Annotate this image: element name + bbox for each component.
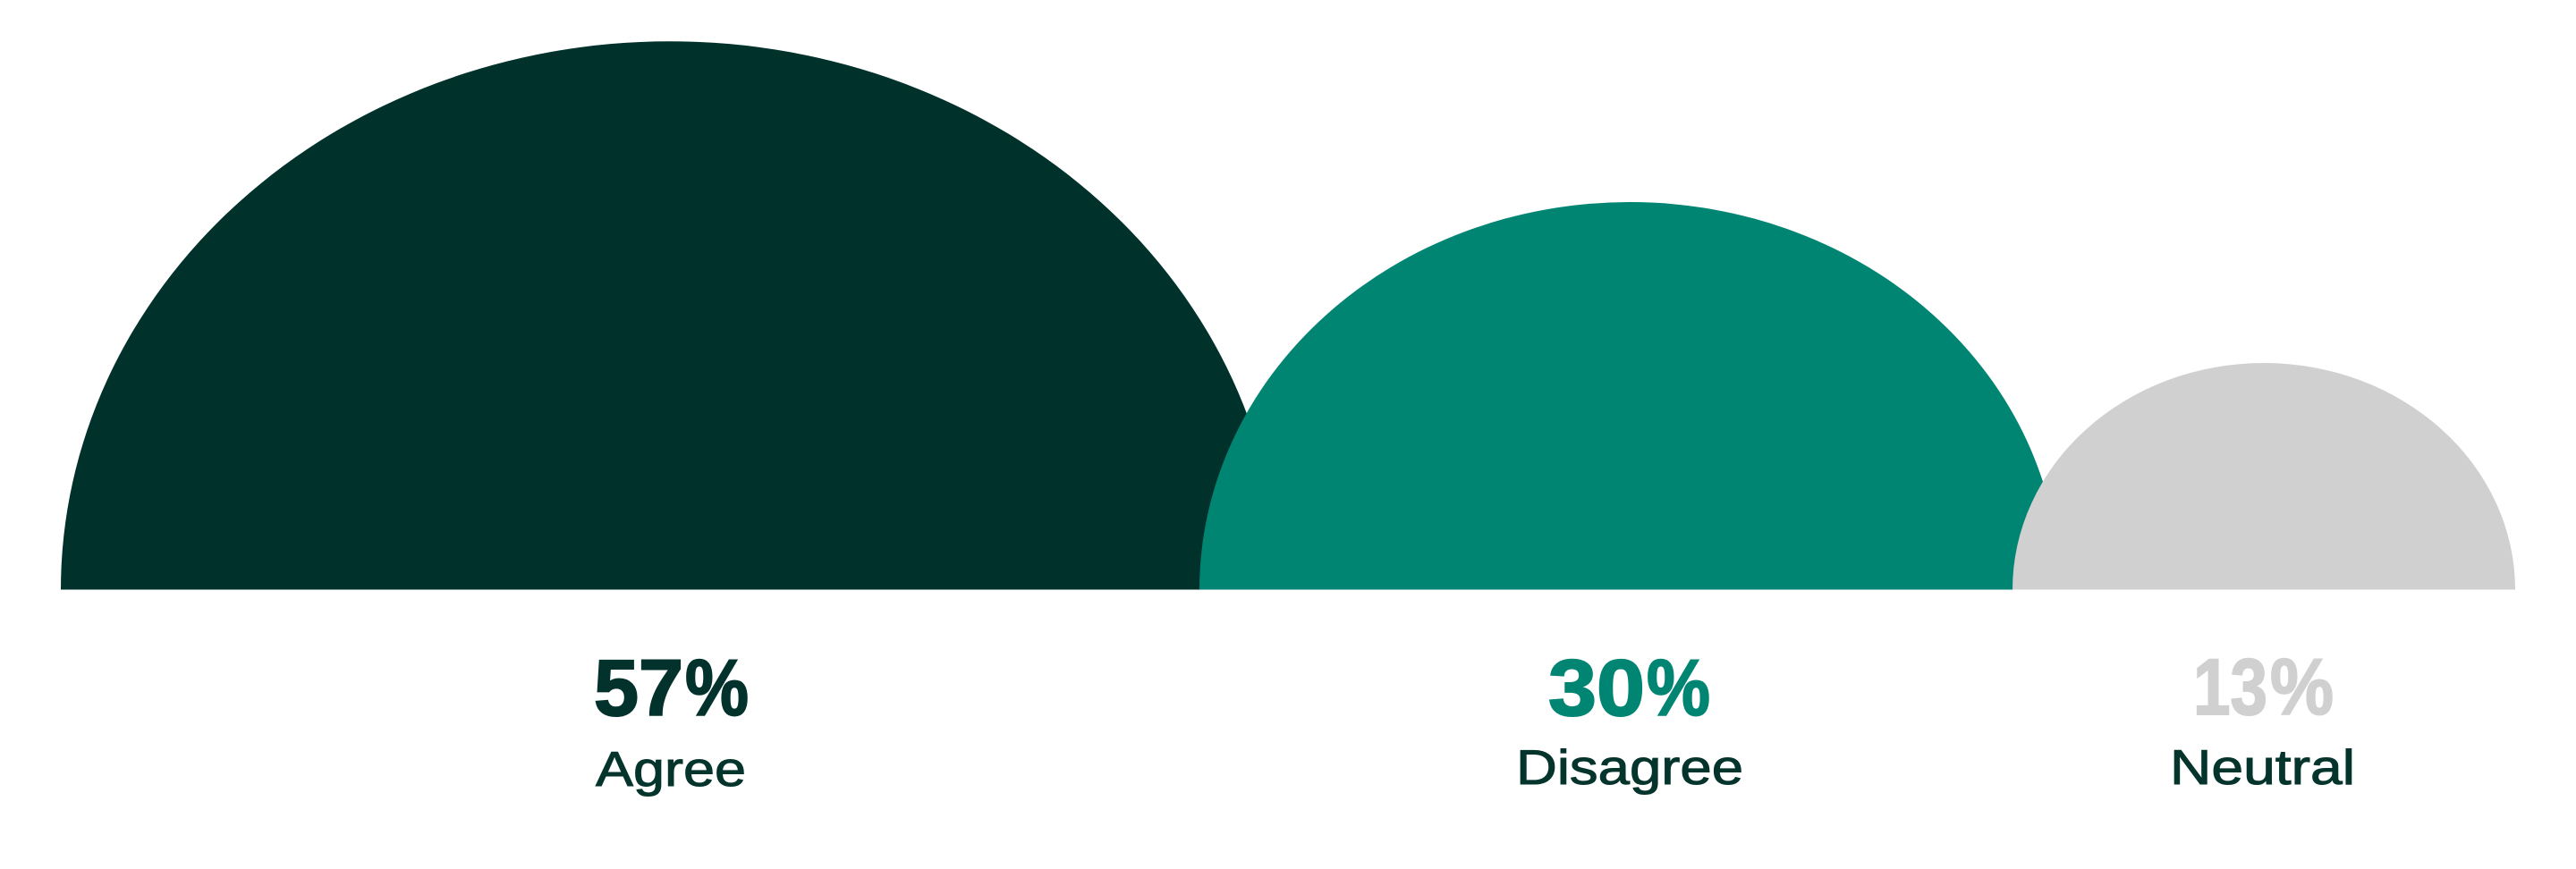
value: 57%: % [685,643,749,732]
label: Disagree [1516,643,1743,795]
category: Disagree: Disagree [1516,739,1743,795]
label: Neutral [2170,642,2355,795]
value: 57%: 57 [594,643,683,732]
value: 13%: % [2270,642,2334,731]
category: Neutral: Neutral [2170,739,2355,795]
value: 30%: 30 [1548,643,1645,732]
value: 13%: 13 [2193,642,2267,731]
value: 30%: % [1647,643,1710,732]
semicircle: Neutral 13% [2012,363,2515,590]
label: Agree [594,643,749,797]
semicircle: Agree 57% [61,41,1279,590]
category: Agree: Agree [596,741,746,797]
semicircle: Disagree 30% [1199,202,2060,590]
